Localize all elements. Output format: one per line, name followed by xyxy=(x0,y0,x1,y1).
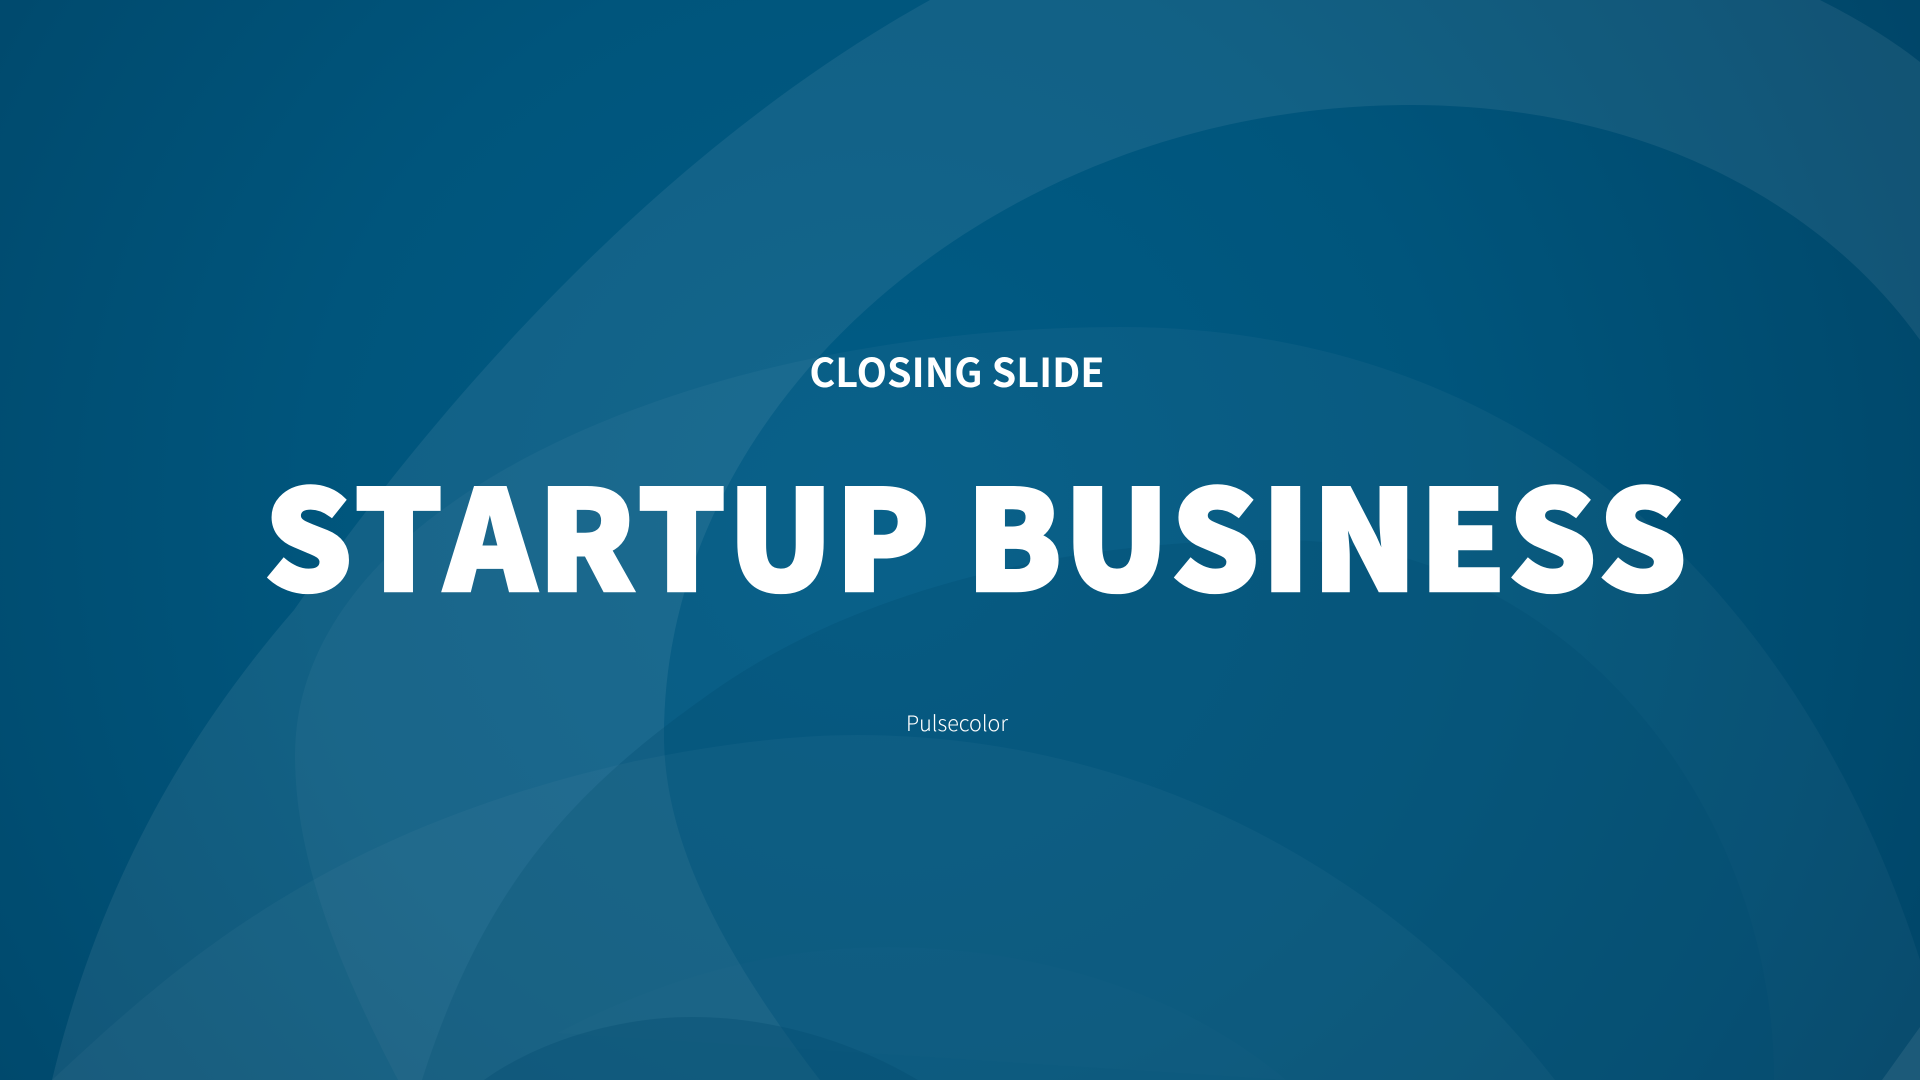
author name: Pulsecolor xyxy=(906,707,1008,738)
eyebrow: closing slide: CLOSING SLIDE xyxy=(809,342,1105,399)
title: startup business: STARTUP BUSINESS xyxy=(265,433,1689,630)
